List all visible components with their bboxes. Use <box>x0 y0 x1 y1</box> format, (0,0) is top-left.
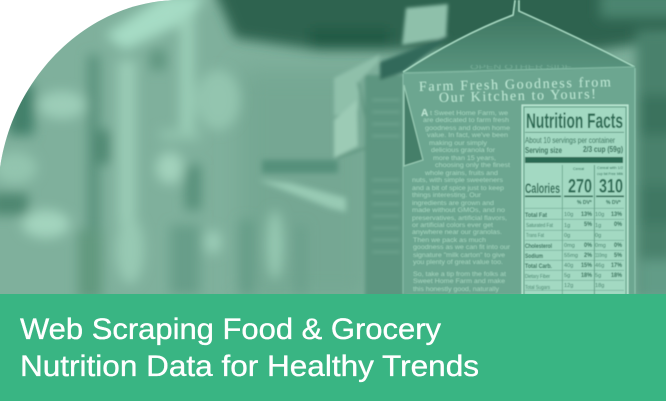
nutrition facts label: 0% <box>584 242 592 249</box>
nutrition facts label: About 10 servings per container <box>525 135 615 145</box>
nutrition facts label: 0% <box>614 221 622 228</box>
carton body copy: made without GMOs, and no <box>412 207 506 214</box>
nutrition facts label: 2/3 cup (59g) <box>583 145 623 154</box>
nutrition facts label: Saturated Fat <box>526 223 553 229</box>
neighbouring carton blurred print <box>372 100 400 252</box>
nutrition facts label: % DV* <box>577 200 592 206</box>
carton body copy: you plenty of great value too. <box>413 259 503 266</box>
carton body copy: ingredients are grown and <box>412 200 495 207</box>
carton body copy: things interesting. Our <box>412 192 481 199</box>
carton body copy: signature "milk carton" to give <box>413 252 506 259</box>
carton body copy: A <box>421 108 428 119</box>
title band <box>0 294 666 401</box>
carton body copy: anywhere near our granolas. <box>412 229 502 236</box>
title: Nutrition Data for Healthy Trends <box>20 350 479 383</box>
nutrition facts label: Calories <box>525 180 560 196</box>
carton body copy: goodness as we can fit into our <box>413 244 510 251</box>
carton body copy: preservatives, artificial flavors, <box>412 215 507 222</box>
nutrition facts label: % DV* <box>606 200 621 206</box>
nutrition facts label: Cholesterol <box>525 243 552 250</box>
nutrition facts label: 1g <box>595 223 601 229</box>
carton headline <box>419 76 611 102</box>
nutrition facts label: Total Carb. <box>525 263 552 270</box>
nutrition facts label: 5g <box>595 273 601 279</box>
nutrition facts label: 310 <box>599 176 623 198</box>
nutrition facts label: Sodium <box>525 253 543 260</box>
carton body copy: are dedicated to farm fresh <box>423 117 510 124</box>
dark corner flap <box>404 85 423 166</box>
carton body copy: goodness and down home <box>425 125 511 132</box>
carton body copy: choosing only the finest <box>435 162 510 169</box>
carton body copy: value. In fact, we've been <box>427 132 509 139</box>
nutrition facts label <box>522 105 628 295</box>
carton headline: Our Kitchen to Yours! <box>439 87 596 106</box>
milk carton <box>403 0 636 295</box>
carton body copy: t Sweet Home Farm, we <box>430 110 509 117</box>
carton body copy: Then we pack as much <box>413 237 487 244</box>
nutrition facts label: 5% <box>584 221 592 228</box>
title <box>20 313 479 383</box>
nutrition facts label: 18% <box>581 272 592 279</box>
nutrition facts label: Trans Fat <box>526 233 544 239</box>
nutrition facts label: Cereal with 1/2 <box>597 166 623 170</box>
carton body copy: delicious granola for <box>431 147 495 154</box>
carton body copy: making our simply <box>429 140 488 147</box>
nutrition facts label: 1g <box>564 223 570 229</box>
nutrition facts label: 12g <box>564 283 573 289</box>
nutrition facts label: cup fat Free Milk <box>597 172 623 176</box>
carton body copy: whole grains, fruits and <box>424 170 499 177</box>
carton body copy <box>412 108 511 293</box>
carton body copy: So, take a tip from the folks at <box>413 271 506 278</box>
carton gable top <box>403 0 636 72</box>
nutrition facts label: 13% <box>581 211 592 218</box>
carton body copy: this honestly good, naturally <box>413 286 500 293</box>
nutrition facts label: 18g <box>595 283 604 289</box>
blurred shelf background <box>0 0 666 300</box>
nutrition facts label: Dietary Fiber <box>525 274 550 280</box>
nutrition facts label: 0mg <box>564 243 575 249</box>
nutrition facts label: 18% <box>611 272 622 279</box>
nutrition facts label: 55mg <box>564 253 578 259</box>
nutrition facts label: 15% <box>581 262 592 269</box>
nutrition facts label: 13% <box>611 211 622 218</box>
nutrition facts label: 10g <box>564 212 573 218</box>
nutrition facts label: 17% <box>611 262 622 269</box>
carton top small print: OPEN OTHER SIDE <box>470 65 572 71</box>
nutrition facts label: 0mg <box>595 243 606 249</box>
nutrition facts label: 0g <box>564 233 570 239</box>
nutrition facts label: Total Sugars <box>525 285 550 291</box>
nutrition facts label: 40g <box>564 263 573 269</box>
nutrition facts label: 46g <box>595 263 604 269</box>
neighbouring carton <box>334 4 452 300</box>
nutrition facts label: Cereal <box>573 166 584 171</box>
carton body copy: and a bit of spice just to keep <box>412 185 505 192</box>
photo: grocery shelf with milk carton <box>0 0 666 300</box>
nutrition facts label: 10g <box>595 212 604 218</box>
nutrition facts label: 0% <box>614 242 622 249</box>
carton body copy: or artificial colors ever get <box>412 222 493 229</box>
carton body copy: nuts, with simple sweeteners <box>412 177 503 184</box>
nutrition facts label: 2% <box>584 252 592 259</box>
carton body copy: more than 15 years, <box>433 155 496 162</box>
nutrition facts label: 270 <box>568 176 592 198</box>
carton headline: Farm Fresh Goodness from <box>419 75 611 95</box>
nutrition facts label: 110mg <box>595 253 607 259</box>
nutrition facts label: 0g <box>595 233 601 239</box>
carton body copy: Sweet Home Farm and make <box>413 278 506 285</box>
nutrition facts label: Serving size <box>525 146 562 155</box>
nutrition facts label: 5g <box>564 273 570 279</box>
nutrition facts label: Total Fat <box>525 212 547 219</box>
nutrition facts label: 5% <box>614 252 622 259</box>
title: Web Scraping Food & Grocery <box>20 313 441 346</box>
